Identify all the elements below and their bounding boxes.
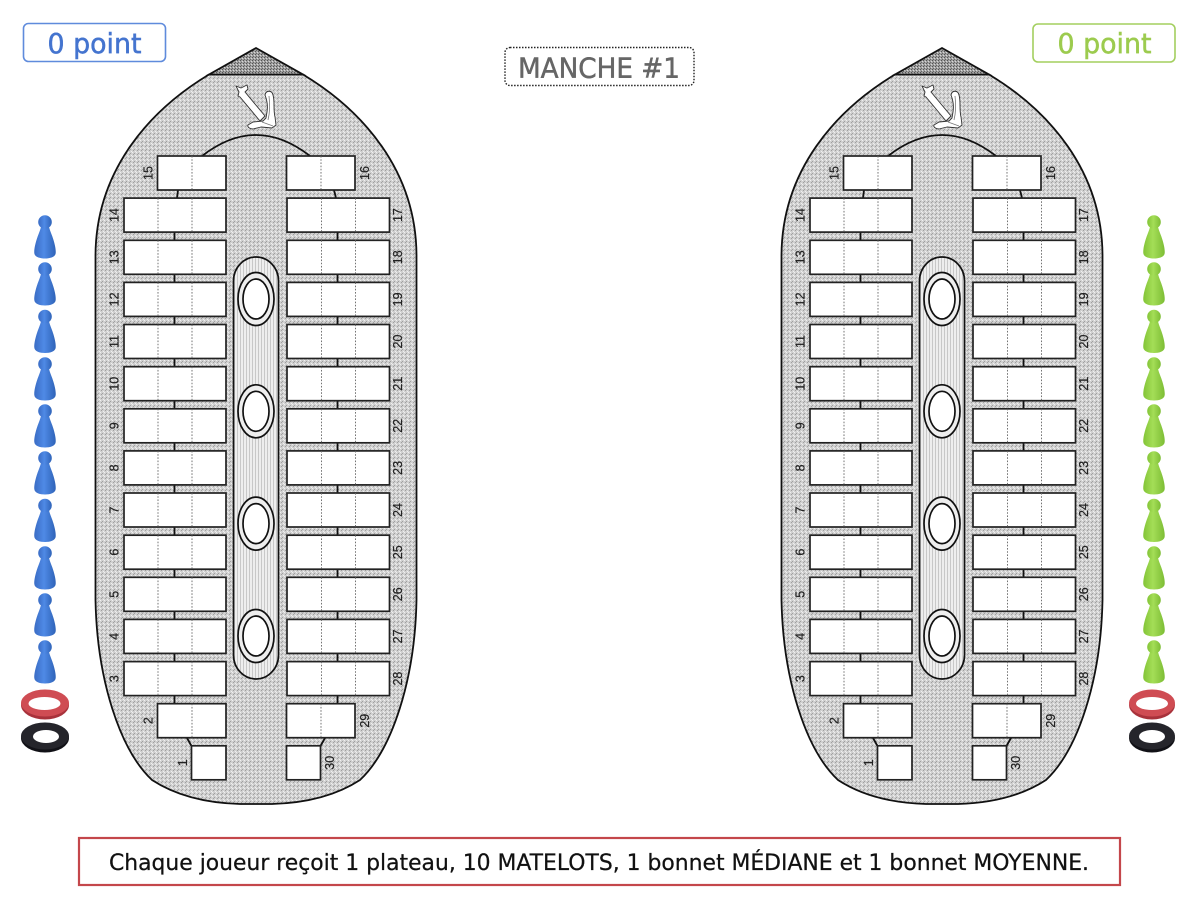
seat row 25: 25 [391,545,405,559]
seat row 14 [794,198,912,232]
seat row 10: 10 [794,377,808,391]
seat row 10: 10 [108,377,122,391]
seat row 28 [973,662,1091,696]
seat row 15 [828,156,912,190]
seat row 27: 27 [391,629,405,643]
seat row 7: 7 [108,506,122,513]
seat row 30: 30 [1009,756,1023,770]
seat row 2: 2 [828,717,842,724]
seat row 22 [287,409,405,443]
seat row 5: 5 [794,591,808,598]
seat row 30: 30 [323,756,337,770]
seat row 15 [142,156,226,190]
score: blue player: 0 point [48,27,142,60]
seat row 16: 16 [1044,166,1058,180]
seat row 4: 4 [108,633,122,640]
seat row 24: 24 [391,503,405,517]
seat row 16: 16 [358,166,372,180]
seat row 6: 6 [794,549,808,556]
seat row 6 [794,535,912,569]
left black ring [21,722,69,752]
seat row 14 [108,198,226,232]
seat row 9: 9 [108,422,122,429]
seat row 12: 12 [794,292,808,306]
seat row 21: 21 [391,377,405,391]
seat row 12 [108,282,226,316]
seat row 7 [794,493,912,527]
seat row 18 [973,240,1091,274]
right black ring [1129,722,1175,752]
seat row 11: 11 [108,335,122,348]
seat row 22: 22 [1077,419,1091,433]
seat row 19: 19 [391,292,405,306]
seat row 29: 29 [358,714,372,728]
seat row 6: 6 [108,549,122,556]
seat row 9 [794,409,912,443]
board: left ship [96,48,416,804]
seat row 19 [973,282,1091,316]
seat row 26: 26 [391,587,405,601]
seat row 22 [973,409,1091,443]
seat row 24 [973,493,1091,527]
seat row 16 [972,156,1058,190]
seat row 9: 9 [794,422,808,429]
score: green player: 0 point [1058,27,1152,60]
seat row 26 [973,577,1091,611]
seat row 17 [973,198,1091,232]
seat row 4 [794,619,912,653]
seat row 27 [287,619,405,653]
seat row 26 [287,577,405,611]
seat row 5 [108,577,226,611]
seat row 14: 14 [108,208,122,222]
seat row 5 [794,577,912,611]
seat row 1: 1 [176,759,190,766]
seat row 27: 27 [1077,629,1091,643]
seat row 10 [794,367,912,401]
seat row 23 [287,451,405,485]
seat row 1: 1 [862,759,876,766]
score: blue player [24,24,166,62]
seat row 23: 23 [391,461,405,475]
seat row 13: 13 [794,250,808,264]
seat row 17 [287,198,405,232]
seat row 29 [286,704,372,738]
seat row 13: 13 [108,250,122,264]
seat row 16 [286,156,372,190]
score: green player [1033,24,1175,62]
seat row 17: 17 [391,208,405,222]
blue pawns column [34,215,56,683]
seat row 27 [973,619,1091,653]
seat row 3: 3 [108,675,122,682]
seat row 20: 20 [391,335,405,348]
seat row 24: 24 [1077,503,1091,517]
seat row 18: 18 [391,250,405,264]
seat row 4: 4 [794,633,808,640]
seat row 11 [794,324,912,358]
seat row 28: 28 [391,672,405,686]
seat row 28: 28 [1077,672,1091,686]
seat row 30 [972,746,1023,780]
seat row 17: 17 [1077,208,1091,222]
seat row 19 [287,282,405,316]
right red ring [1129,690,1175,720]
seat row 22: 22 [391,419,405,433]
seat row 2 [142,704,226,738]
seat row 21 [287,367,405,401]
seat row 26: 26 [1077,587,1091,601]
seat row 29 [972,704,1058,738]
seat row 7 [108,493,226,527]
seat row 9 [108,409,226,443]
instruction callout: Chaque joueur reçoit 1 plateau, 10 MATELOTS, 1 bonnet MÉDIANE et 1 bonnet MOYENNE. [109,850,1089,876]
seat row 7: 7 [794,506,808,513]
seat row 8 [794,451,912,485]
seat row 23: 23 [1077,461,1091,475]
seat row 25 [973,535,1091,569]
seat row 18 [287,240,405,274]
seat row 8 [108,451,226,485]
seat row 11: 11 [794,335,808,348]
seat row 3: 3 [794,675,808,682]
seat row 4 [108,619,226,653]
seat row 28 [287,662,405,696]
seat row 15: 15 [828,166,842,180]
board: right ship [782,48,1102,804]
seat row 25: 25 [1077,545,1091,559]
instruction callout [79,838,1120,885]
seat row 3 [108,662,226,696]
seat row 3 [794,662,912,696]
seat row 2 [828,704,912,738]
seat row 1 [862,746,912,780]
seat row 20 [973,324,1091,358]
seat row 20 [287,324,405,358]
seat row 12: 12 [108,292,122,306]
seat row 18: 18 [1077,250,1091,264]
green pawns column [1143,215,1165,683]
seat row 10 [108,367,226,401]
seat row 24 [287,493,405,527]
left red ring [21,690,69,720]
seat row 8: 8 [794,464,808,471]
seat row 1 [176,746,226,780]
seat row 12 [794,282,912,316]
seat row 23 [973,451,1091,485]
seat row 19: 19 [1077,292,1091,306]
seat row 6 [108,535,226,569]
seat row 5: 5 [108,591,122,598]
seat row 25 [287,535,405,569]
seat row 20: 20 [1077,335,1091,348]
seat row 13 [108,240,226,274]
seat row 30 [286,746,337,780]
round title: MANCHE #1 [518,52,680,84]
seat row 2: 2 [142,717,156,724]
seat row 14: 14 [794,208,808,222]
seat row 13 [794,240,912,274]
seat row 8: 8 [108,464,122,471]
seat row 11 [108,324,226,358]
seat row 21: 21 [1077,377,1091,391]
seat row 21 [973,367,1091,401]
seat row 29: 29 [1044,714,1058,728]
seat row 15: 15 [142,166,156,180]
